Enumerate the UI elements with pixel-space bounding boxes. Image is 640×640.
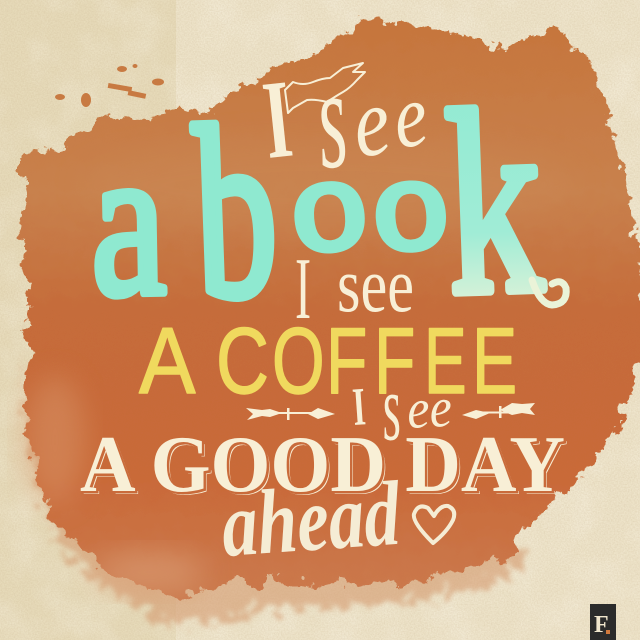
logo badge: F — [594, 612, 609, 638]
heading: a book — [89, 57, 547, 350]
heading: I see (third): ee — [405, 376, 453, 441]
heading: I see (third) — [351, 355, 453, 461]
heading: A COFFEE: A — [139, 308, 196, 413]
logo badge — [590, 604, 616, 640]
heading: I see (first): e — [346, 66, 396, 179]
heading: A COFFEE: O — [272, 309, 325, 414]
heading: a book: a — [89, 100, 168, 341]
heading: a book: o — [283, 131, 375, 283]
heading: A GOOD DAY: A GOOD DAY — [82, 422, 566, 510]
heading: a book: o — [367, 131, 454, 281]
heading: ahead: ahead — [218, 462, 405, 576]
heading: I see (first): e — [387, 64, 433, 167]
icon: right arrow — [462, 403, 535, 419]
heading: I see (third): I — [351, 376, 367, 437]
paint flecks — [55, 64, 164, 107]
heading: A COFFEE — [139, 308, 517, 414]
heading: A COFFEE: F — [326, 309, 367, 414]
heading: I see (second): I — [295, 241, 311, 338]
heading: A COFFEE: C — [216, 308, 269, 413]
heading: A COFFEE: E — [424, 309, 467, 414]
heading: a book: k — [442, 57, 547, 349]
heading: a book: b — [190, 75, 281, 350]
heading: A GOOD DAY: A GOOD DAY — [83, 424, 568, 512]
heading: I see (second) — [295, 241, 414, 338]
heading: A GOOD DAY: A GOOD DAY — [80, 421, 565, 509]
heading: I see (first): I — [258, 57, 298, 183]
heading: I see (third): s — [378, 355, 404, 461]
heading: A COFFEE: F — [374, 309, 415, 414]
heading: A COFFEE: E — [472, 309, 517, 414]
icon: heart — [414, 506, 454, 543]
heading: I see (first) — [258, 37, 433, 199]
heading: I see (first): s — [309, 37, 354, 199]
k tail curl — [532, 280, 566, 305]
icon: waving flag — [285, 63, 365, 113]
icon: left arrow — [246, 408, 335, 420]
heading: I see (second): see — [337, 241, 414, 328]
